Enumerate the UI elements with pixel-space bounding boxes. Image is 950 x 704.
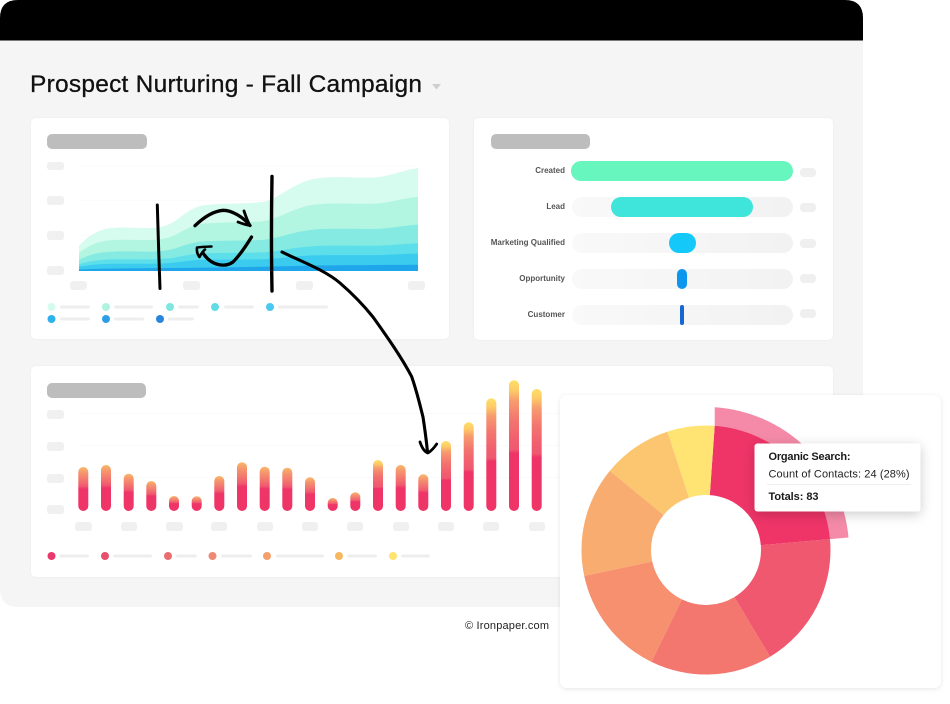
right boundary line [270,176,274,291]
funnel labels: Created [535,166,565,175]
tooltip [754,444,920,512]
funnel labels: Marketing Qualified [491,238,565,247]
panel: area chart [31,118,449,339]
panel: stacked bar chart [31,366,833,577]
funnel labels: Lead [546,202,565,211]
panel: donut chart card [560,395,941,688]
copyright footer: © Ironpaper.com [465,620,549,632]
funnel labels: Opportunity [519,274,566,283]
arrow: forward loop [195,210,250,226]
segment: organic search [710,426,830,545]
stacked area chart [79,168,418,271]
dashboard window [0,0,863,607]
legend [48,552,430,560]
highlighted segment ring [715,407,848,539]
funnel labels [491,166,566,319]
donut chart [581,407,848,674]
icon: dropdown caret [432,84,441,90]
bars [78,380,542,511]
title: Prospect Nurturing - Fall Campaign [30,71,422,98]
funnel labels: Customer [528,310,565,319]
left boundary line [157,205,160,288]
arrow: long connector to bar chart [282,252,437,453]
tooltip: Organic Search: [768,451,850,463]
tooltip: Totals: 83 [768,491,818,503]
legend [48,303,328,323]
funnel bars [571,161,793,325]
tooltip: Count of Contacts: 24 (28%) [768,468,910,480]
panel: funnel chart [474,118,833,340]
arrow: return loop [197,237,252,265]
window top bar [0,0,863,40]
hand-drawn cycle annotation [157,176,437,453]
